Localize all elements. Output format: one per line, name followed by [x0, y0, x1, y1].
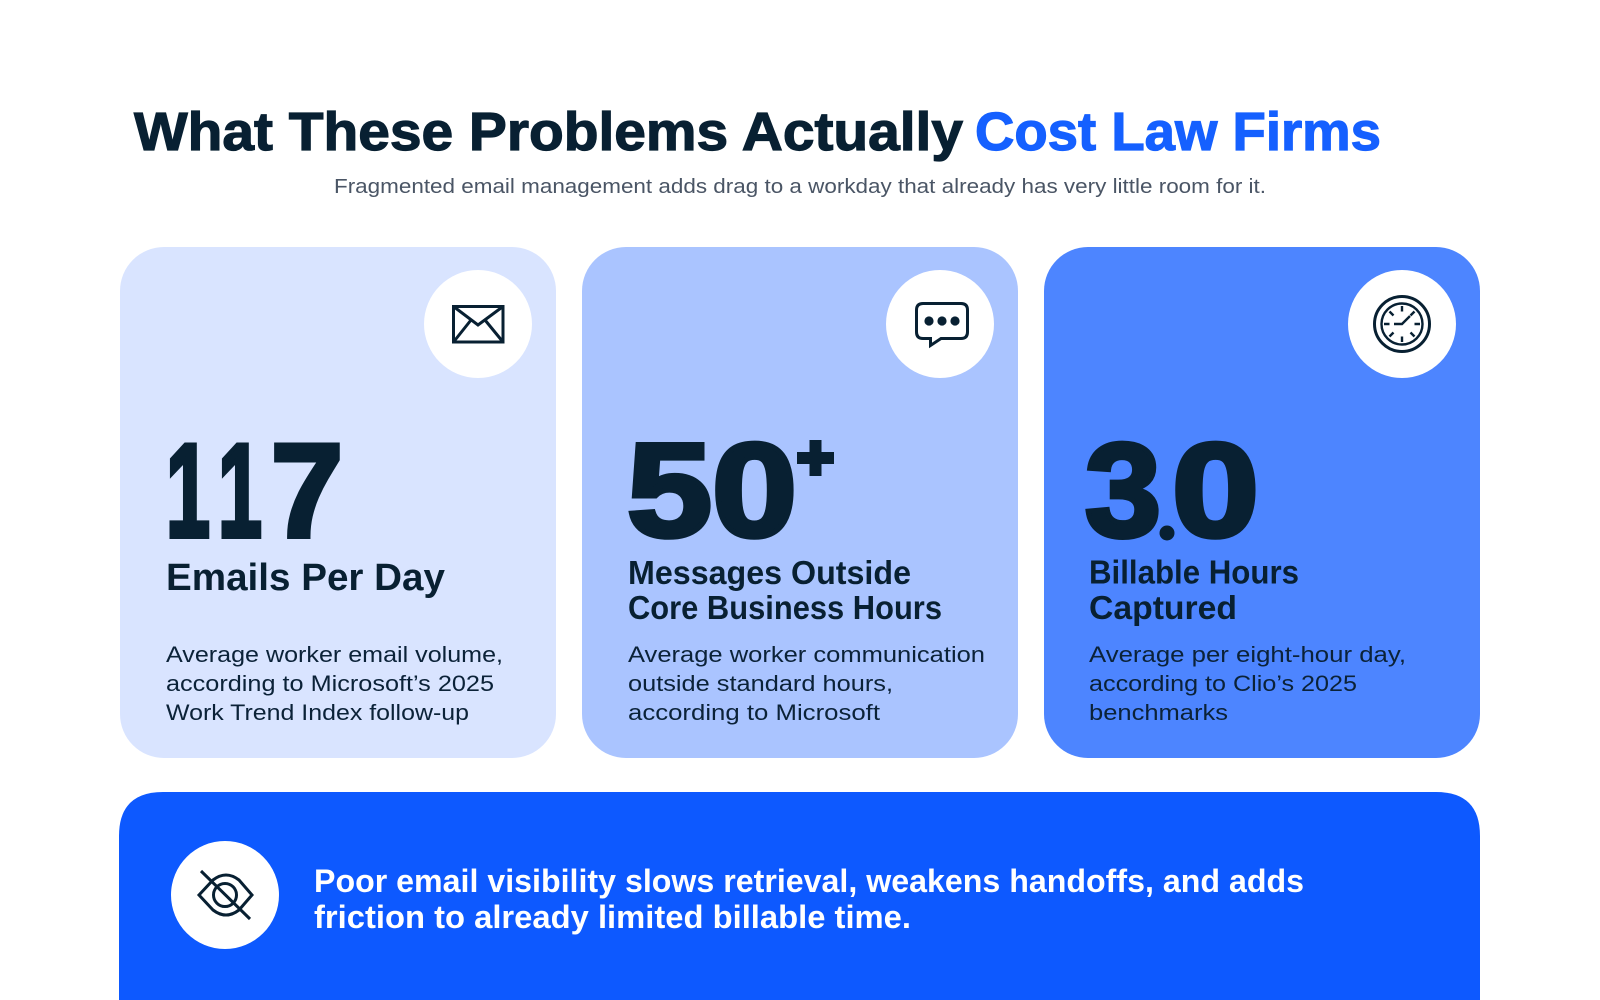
description	[628, 642, 985, 725]
label: billable hours captured: Billable Hours	[1089, 554, 1299, 590]
description: Average worker communication	[628, 642, 985, 667]
label: emails per day: Emails Per Day	[166, 557, 445, 599]
stat: 117	[166, 418, 343, 566]
description: Work Trend Index follow-up	[166, 700, 469, 725]
description: outside standard hours,	[628, 671, 893, 696]
subtitle: Fragmented email management adds drag to a workday that already has very little room for it.	[334, 176, 1266, 198]
label: billable hours captured	[1089, 554, 1299, 626]
icon: crossed-out eye	[171, 841, 279, 949]
stat: 117: 1	[166, 418, 210, 566]
description	[166, 642, 503, 725]
takeaway text: friction to already limited billable time.	[314, 899, 911, 935]
description: according to Microsoft’s 2025	[166, 671, 494, 696]
description	[1089, 642, 1406, 725]
stat: 117: 1	[218, 418, 262, 566]
stat: 3.0: 3	[1085, 417, 1161, 565]
takeaway text	[314, 863, 1304, 935]
title: What These Problems Actually	[134, 102, 963, 162]
description: according to Microsoft	[628, 700, 880, 725]
panel: billable hours	[1044, 247, 1480, 758]
label: billable hours captured: Captured	[1089, 589, 1237, 626]
label: messages outside core business hours: Core Business Hours	[628, 589, 942, 626]
icon: chat bubble	[886, 270, 994, 378]
panel: emails per day	[120, 247, 556, 758]
description: benchmarks	[1089, 700, 1228, 725]
description: according to Clio’s 2025	[1089, 671, 1357, 696]
stat: 50+: 50	[627, 417, 797, 565]
description: Average per eight-hour day,	[1089, 642, 1406, 667]
title	[134, 102, 1381, 162]
stat: 3.0	[1085, 417, 1259, 565]
panel: messages outside hours	[582, 247, 1018, 758]
icon: envelope	[424, 270, 532, 378]
description: Average worker email volume,	[166, 642, 503, 667]
title: Cost Law Firms	[975, 102, 1381, 162]
takeaway text: Poor email visibility slows retrieval, weakens handoffs, and adds	[314, 863, 1304, 899]
label: messages outside core business hours	[628, 554, 942, 626]
stat: 117: 7	[271, 418, 343, 566]
stat: 3.0: 0	[1172, 417, 1259, 565]
icon: clock	[1348, 270, 1456, 378]
panel: takeaway banner	[119, 792, 1480, 1000]
label: messages outside core business hours: Messages Outside	[628, 554, 911, 591]
